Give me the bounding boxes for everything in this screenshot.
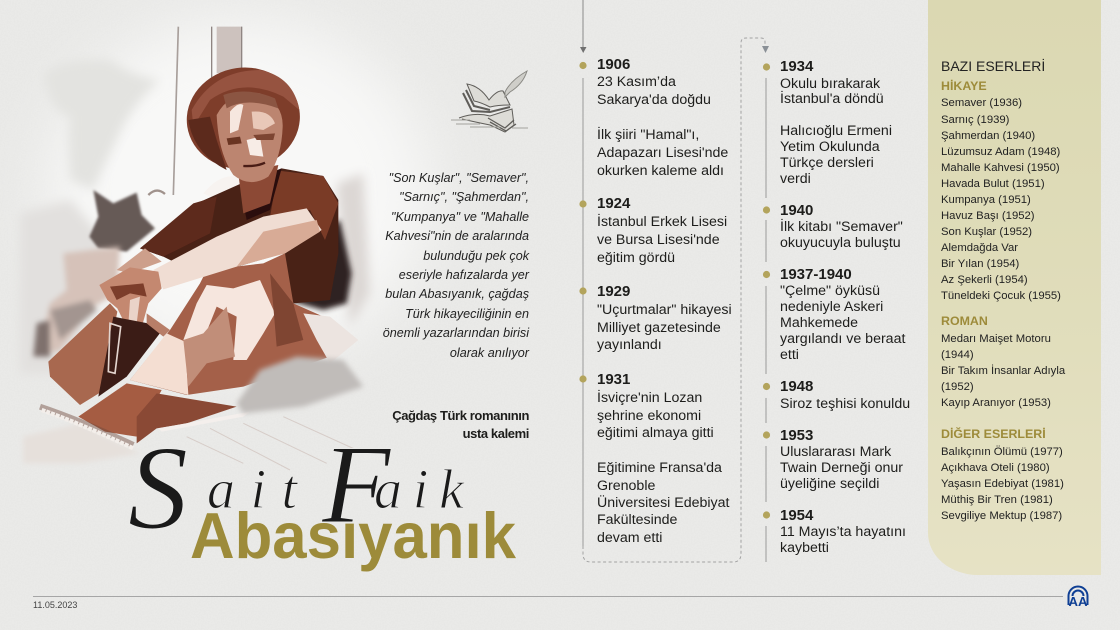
grey smoke fade	[237, 357, 363, 413]
subtitle	[392, 408, 529, 441]
subtitle: usta kalemi	[463, 426, 529, 441]
1931 entry: Grenoble	[597, 478, 655, 494]
list: novels: ROMAN	[941, 314, 988, 328]
background wash stain	[20, 59, 370, 373]
title: author name	[128, 430, 517, 572]
1906 entry: Adapazarı Lisesi'nde	[597, 145, 728, 161]
1940 entry: 1940	[780, 202, 813, 219]
quote text: Kahvesi"nin de aralarında	[385, 229, 529, 243]
1954 entry: 1954	[780, 507, 813, 524]
1931 entry	[597, 371, 730, 546]
1953 entry: üyeliğine seçildi	[780, 476, 879, 492]
1906 entry: okurken kaleme aldı	[597, 163, 724, 179]
list: stories: Alemdağda Var	[941, 242, 1018, 254]
1906 entry: İlk şiiri "Hamal"ı,	[597, 127, 699, 143]
1954 entry: 11 Mayıs’ta hayatını	[780, 524, 906, 540]
quote text: bulunduğu pek çok	[423, 249, 529, 263]
cat	[89, 190, 155, 252]
quote text: Türk hikayeciliğinin en	[405, 307, 529, 321]
list: other works: Yaşasın Edebiyat (1981)	[941, 478, 1064, 490]
list: novels: Bir Takım İnsanlar Adıyla	[941, 365, 1065, 377]
1931 entry: devam etti	[597, 530, 662, 546]
1929 entry: Milliyet gazetesinde	[597, 320, 721, 336]
quote text: "Son Kuşlar", "Semaver",	[389, 171, 529, 185]
list: novels: Kayıp Aranıyor (1953)	[941, 397, 1051, 409]
1934 entry: Halıcıoğlu Ermeni	[780, 123, 892, 139]
1931 entry: Fakültesinde	[597, 512, 677, 528]
1937-1940 entry	[780, 266, 906, 363]
1924 entry: 1924	[597, 195, 630, 212]
list: novels: (1952)	[941, 381, 974, 393]
photo: Sait Faik sitting on boat deck	[22, 26, 372, 470]
list: stories: Lüzumsuz Adam (1948)	[941, 146, 1060, 158]
list: stories: Havada Bulut (1951)	[941, 178, 1045, 190]
ship mast	[148, 27, 242, 195]
list: novels	[941, 314, 1066, 409]
1929 entry: "Uçurtmalar" hikayesi	[597, 302, 732, 318]
belongings at left	[33, 247, 120, 357]
bare foot and sandal	[78, 383, 250, 443]
1954 entry	[780, 507, 906, 556]
neck and hat	[180, 60, 306, 213]
1931 entry: Eğitimine Fransa'da	[597, 460, 722, 476]
rope on deck	[40, 407, 133, 448]
1906 entry: 23 Kasım’da	[597, 74, 676, 90]
1937-1940 entry: yargılandı ve beraat	[780, 331, 905, 347]
list: other works: Sevgiliye Mektup (1987)	[941, 510, 1062, 522]
icon: open books and quill	[451, 70, 528, 133]
list: stories	[941, 79, 1061, 302]
list: stories: Tüneldeki Çocuk (1955)	[941, 290, 1061, 302]
quote text: önemli yazarlarından birisi	[383, 326, 529, 340]
1906 entry: Sakarya'da doğdu	[597, 92, 711, 108]
1954 entry: kaybetti	[780, 540, 829, 556]
lap trousers	[130, 253, 358, 395]
1934 entry: 1934	[780, 58, 813, 75]
quote text: olarak anılıyor	[450, 346, 529, 360]
1953 entry: Twain Derneği onur	[780, 460, 903, 476]
1934 entry: Yetim Okulunda	[780, 139, 880, 155]
1924 entry: eğitim gördü	[597, 250, 675, 266]
1937-1940 entry: "Çelme" öyküsü	[780, 283, 880, 299]
1924 entry: ve Bursa Lisesi'nde	[597, 232, 720, 248]
deck boards	[23, 417, 357, 470]
1940 entry	[780, 202, 903, 251]
timeline connectors	[579, 0, 770, 562]
quote text: "Sarnıç", "Şahmerdan",	[399, 190, 529, 204]
near arm and hands	[99, 208, 322, 327]
1937-1940 entry: etti	[780, 347, 799, 363]
list: stories: Kumpanya (1951)	[941, 194, 1031, 206]
1937-1940 entry: nedeniyle Askeri	[780, 299, 883, 315]
1937-1940 entry: Mahkemede	[780, 315, 858, 331]
list: other works: Balıkçının Ölümü (1977)	[941, 446, 1063, 458]
1929 entry	[597, 283, 732, 353]
t-shirt	[140, 168, 338, 303]
1934 entry: verdi	[780, 171, 811, 187]
footer rule	[33, 596, 1063, 597]
quote text: bulan Abasıyanık, çağdaş	[385, 287, 529, 301]
1948 entry: Siroz teşhisi konuldu	[780, 396, 910, 412]
title: Sait Faik signature: ait	[207, 459, 298, 521]
1940 entry: okuyucuyla buluştu	[780, 235, 901, 251]
1906 entry	[597, 56, 728, 179]
1931 entry: Üniversitesi Edebiyat	[597, 495, 729, 511]
far leg and dark gap	[48, 303, 170, 405]
list: stories: HİKAYE	[941, 79, 987, 93]
1934 entry	[780, 58, 892, 187]
list: other works: Müthiş Bir Tren (1981)	[941, 494, 1053, 506]
panel: selected works	[928, 0, 1101, 575]
quote text: eseriyle hafızalarda yer	[399, 268, 529, 282]
date: 11.05.2023	[33, 600, 77, 610]
1924 entry	[597, 195, 727, 266]
1948 entry: 1948	[780, 378, 813, 395]
list: other works: Açıkhava Oteli (1980)	[941, 462, 1050, 474]
1953 entry: Uluslararası Mark	[780, 444, 891, 460]
list: stories: Az Şekerli (1954)	[941, 274, 1028, 286]
icon: AA logo	[1068, 586, 1088, 607]
1906 entry: 1906	[597, 56, 630, 73]
1929 entry: yayınlandı	[597, 337, 662, 353]
timeline column 2	[780, 58, 910, 556]
1934 entry: Okulu bırakarak	[780, 76, 880, 92]
list: stories: Bir Yılan (1954)	[941, 258, 1019, 270]
list: stories: Şahmerdan (1940)	[941, 130, 1035, 142]
1929 entry: 1929	[597, 283, 630, 300]
timeline column 1	[597, 56, 732, 546]
white cushion behind	[203, 176, 243, 200]
1931 entry: İsviçre'nin Lozan	[597, 390, 702, 406]
1940 entry: İlk kitabı "Semaver"	[780, 219, 903, 235]
dark back shadow	[283, 220, 352, 310]
title: Abasıyanık: Abasıyanık	[190, 499, 517, 572]
1931 entry: 1931	[597, 371, 630, 388]
heading: selected works: BAZI ESERLERİ	[941, 58, 1045, 74]
face	[217, 92, 283, 182]
list: stories: Sarnıç (1939)	[941, 114, 1009, 126]
list: novels: Medarı Maişet Motoru	[941, 333, 1051, 345]
list: stories: Son Kuşlar (1952)	[941, 226, 1032, 238]
1937-1940 entry: 1937-1940	[780, 266, 852, 283]
1953 entry: 1953	[780, 427, 813, 444]
quote text	[383, 171, 530, 360]
subtitle: Çağdaş Türk romanının	[392, 408, 529, 423]
list: other works: DİĞER ESERLERİ	[941, 427, 1046, 441]
title: Sait Faik signature	[128, 421, 465, 554]
1934 entry: İstanbul'a döndü	[780, 91, 884, 107]
quote text: "Kumpanya" ve "Mahalle	[391, 210, 529, 224]
list: stories: Havuz Başı (1952)	[941, 210, 1035, 222]
list: stories: Mahalle Kahvesi (1950)	[941, 162, 1060, 174]
1934 entry: Türkçe dersleri	[780, 155, 874, 171]
list: novels: (1944)	[941, 349, 974, 361]
1953 entry	[780, 427, 903, 492]
1931 entry: şehrine ekonomi	[597, 408, 701, 424]
list: other works	[941, 427, 1064, 522]
1924 entry: İstanbul Erkek Lisesi	[597, 214, 727, 230]
1948 entry	[780, 378, 910, 412]
title: Sait Faik signature: aik	[374, 459, 465, 521]
list: stories: Semaver (1936)	[941, 97, 1022, 109]
1931 entry: eğitimi almaya gitti	[597, 425, 714, 441]
